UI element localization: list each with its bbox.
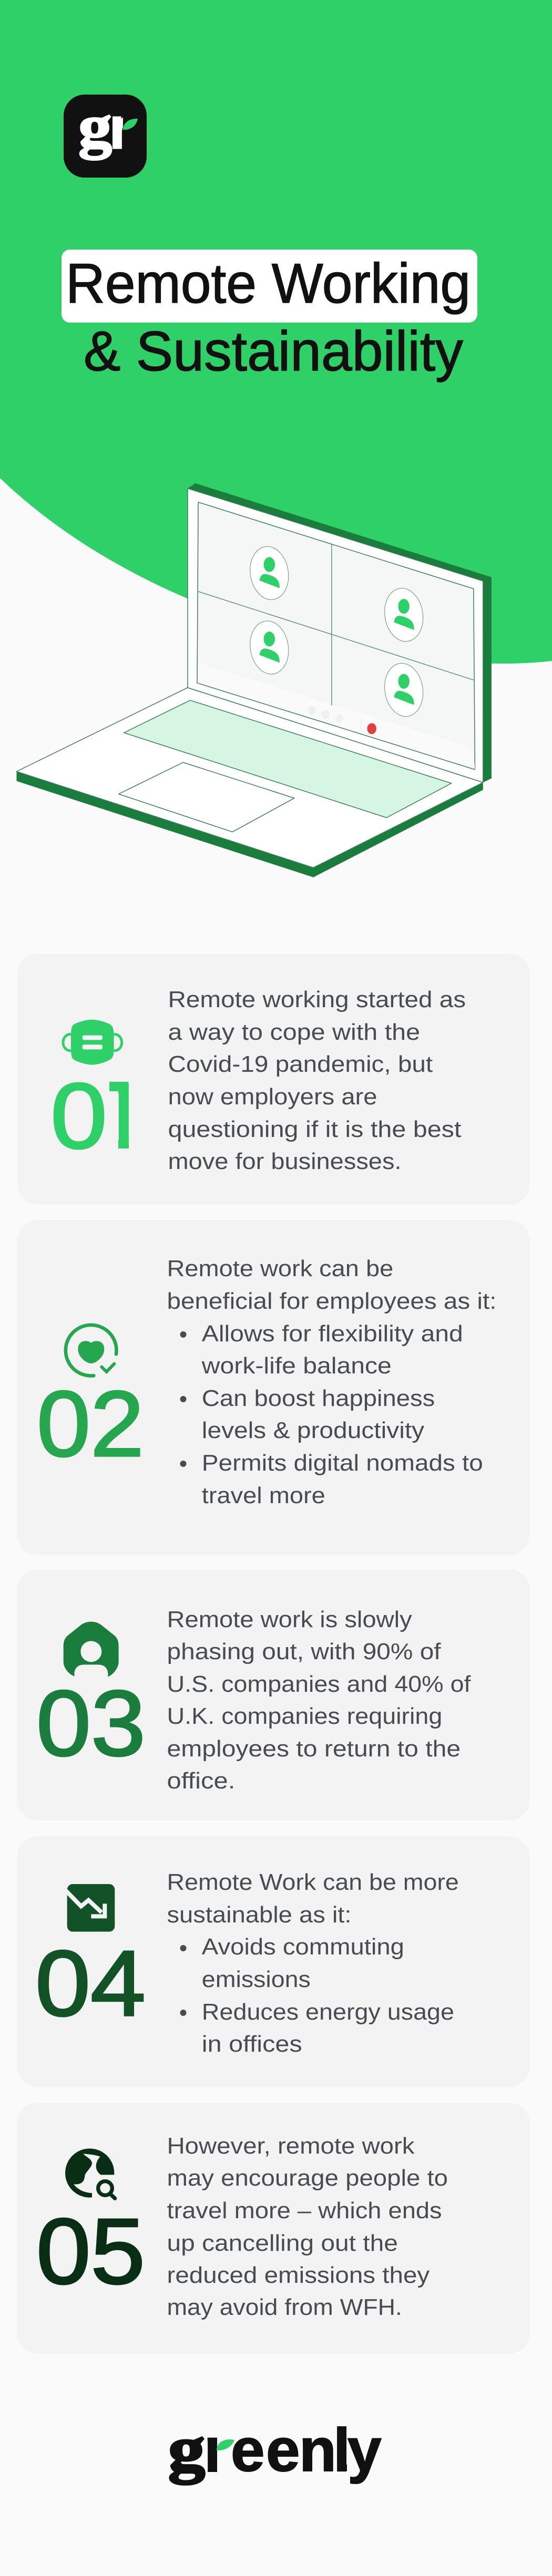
footer logo: greenly: eenly — [231, 2416, 382, 2484]
number 05: 05 — [36, 2199, 145, 2303]
number 04: 04 — [35, 1931, 146, 2035]
avatar bottom-right — [382, 662, 426, 718]
text block 01: move for businesses. — [168, 1149, 402, 1174]
text block 01: a way to cope with the — [168, 1019, 420, 1045]
text block 05: reduced emissions they — [167, 2262, 430, 2288]
text block 02: Can boost happiness — [202, 1385, 435, 1411]
text block 05: may encourage people to — [167, 2165, 448, 2191]
text block 02 — [167, 1256, 496, 1508]
header green background — [0, 0, 552, 664]
icon: greenly app logo: r — [109, 96, 131, 160]
text block 01: questioning if it is the best — [168, 1116, 461, 1142]
text block 02: beneficial for employees as it: — [167, 1288, 496, 1314]
title: Remote Working — [66, 252, 471, 315]
call controls — [308, 706, 376, 734]
title — [62, 250, 477, 382]
avatar bottom-left — [248, 620, 291, 676]
avatar top-right — [382, 587, 426, 643]
text block 03: phasing out, with 90% of — [167, 1639, 441, 1664]
text block 05: may avoid from WFH. — [167, 2294, 402, 2320]
text block 05 — [167, 2133, 448, 2320]
text block 04: Avoids commuting — [202, 1934, 404, 1960]
text block 04 — [167, 1869, 459, 2057]
text block 04: sustainable as it: — [167, 1902, 351, 1928]
text block 03: U.S. companies and 40% of — [167, 1671, 471, 1697]
text block 02: work-life balance — [201, 1353, 392, 1379]
icon: downward trend chart — [66, 1884, 115, 1932]
text block 01: Covid-19 pandemic, but — [168, 1051, 433, 1077]
text block 03: Remote work is slowly — [167, 1607, 412, 1632]
text block 02: Allows for flexibility and — [202, 1321, 463, 1347]
text block 04: Remote Work can be more — [167, 1869, 459, 1895]
icon: heart in circle with check — [66, 1325, 117, 1376]
text block 01: Remote working started as — [168, 987, 466, 1012]
avatar top-left — [248, 545, 291, 601]
number 02: 02 — [37, 1372, 144, 1476]
text block 03: employees to return to the — [167, 1736, 461, 1762]
icon: greenly app logo — [64, 93, 147, 178]
text block 03: office. — [167, 1768, 235, 1794]
panel: card 05 — [17, 2103, 530, 2354]
text block 04: in offices — [202, 2031, 302, 2057]
number 03: 03 — [36, 1671, 146, 1775]
laptop base — [16, 688, 483, 877]
footer logo: greenly — [169, 2426, 382, 2486]
icon: face mask — [63, 1020, 122, 1065]
text block 02: travel more — [202, 1483, 325, 1508]
title: & Sustainability — [84, 319, 463, 382]
text block 02: levels & productivity — [202, 1418, 424, 1443]
number 01: 0 — [50, 1064, 107, 1168]
text block 05: travel more – which ends — [167, 2198, 442, 2223]
text block 03 — [167, 1607, 471, 1794]
number 01 — [54, 1082, 129, 1150]
icon: person in home — [64, 1622, 119, 1677]
footer logo: greenly: g — [168, 2414, 205, 2485]
text block 01: now employers are — [168, 1084, 377, 1110]
illustration: laptop with video call — [16, 483, 492, 877]
text block 02: Permits digital nomads to — [202, 1450, 483, 1476]
panel: card 01 — [54, 991, 465, 1170]
text block 04: Reduces energy usage — [202, 1999, 454, 2025]
text block 05: up cancelling out the — [167, 2230, 398, 2256]
text block 04: emissions — [202, 1967, 311, 1992]
panel: card 04 — [17, 1836, 530, 2087]
panel: card 03 — [17, 1569, 530, 1820]
icon: globe with magnifier — [65, 2148, 116, 2200]
number 01: 1 — [96, 1064, 148, 1168]
footer logo: greenly: r — [205, 2416, 228, 2484]
panel: card 02 — [17, 1220, 530, 1555]
text block 01 — [168, 987, 466, 1174]
text block 05: However, remote work — [167, 2133, 415, 2159]
text block 03: U.K. companies requiring — [167, 1703, 442, 1729]
icon: greenly app logo: g — [78, 93, 112, 160]
text block 02: Remote work can be — [167, 1256, 393, 1281]
